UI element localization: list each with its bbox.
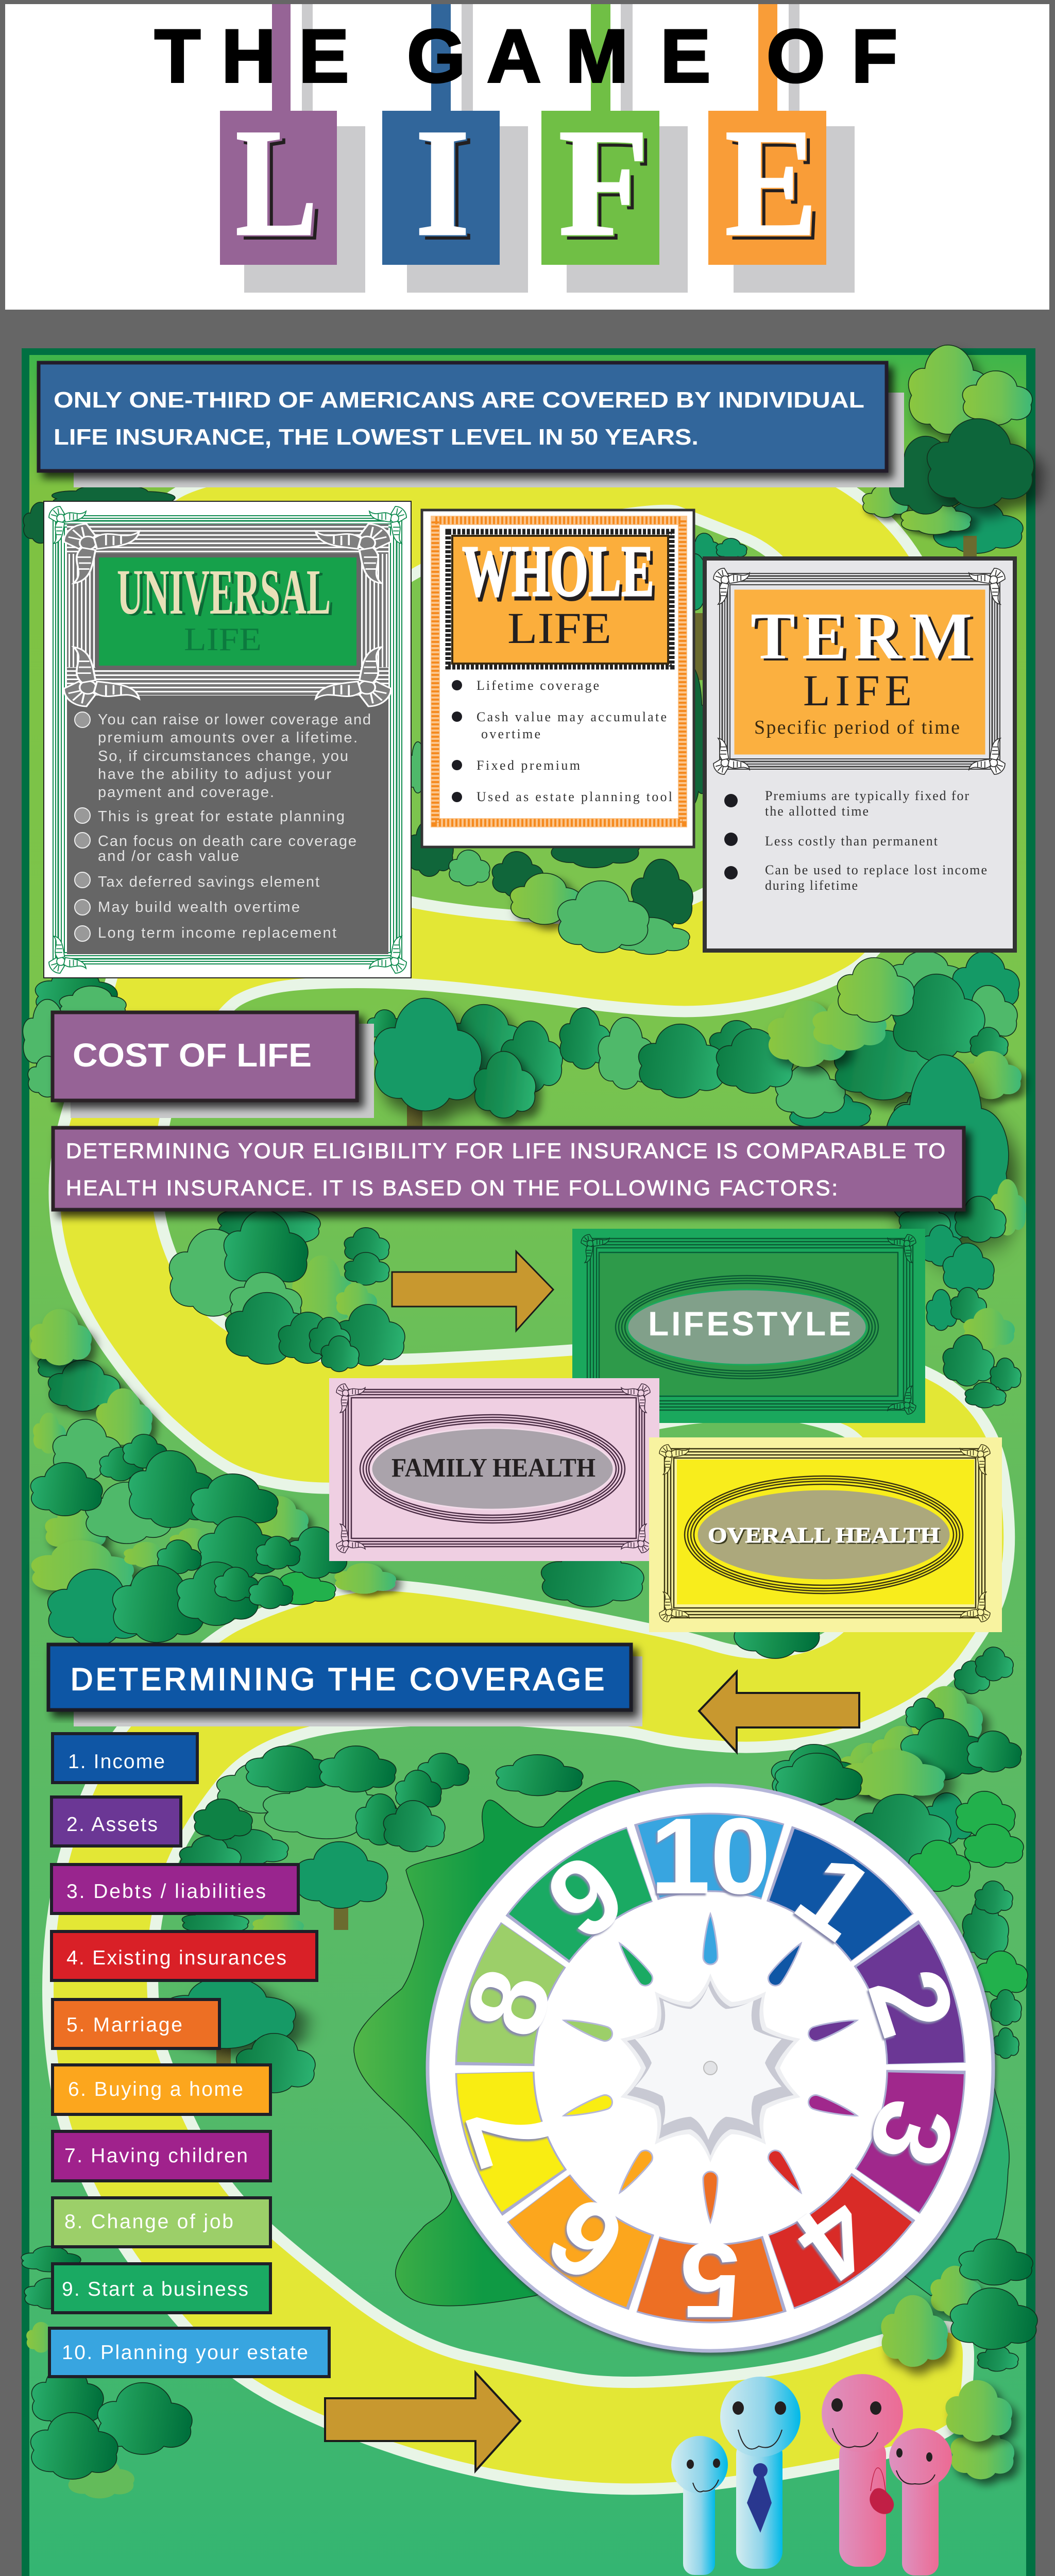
heading: universal life	[117, 557, 334, 657]
trees: under family and overall health cards	[541, 1546, 821, 1658]
ornate corners: overall health	[659, 1445, 990, 1622]
text: term life list: Less costly than permanent	[765, 834, 938, 849]
list: coverage factors	[49, 1734, 329, 2377]
card: lifestyle	[572, 1229, 925, 1423]
callout: only one-third: LIFE INSURANCE, THE LOWEST LEVEL IN 50 YEARS.	[54, 425, 699, 450]
item 3: 3. Debts / liabilities	[66, 1880, 266, 1903]
item 10	[49, 2328, 329, 2377]
tile: L: L	[239, 99, 320, 270]
heading: universal life: LIFE	[184, 621, 262, 657]
text: universal list	[98, 711, 371, 941]
item 7	[53, 2131, 270, 2181]
text: term life list: during lifetime	[765, 878, 858, 893]
wheel numbers: 9	[526, 1830, 645, 1963]
ornate corners: universal	[49, 506, 406, 973]
panel: universal life	[44, 501, 411, 978]
heading: determining the coverage	[48, 1645, 642, 1726]
title banner	[5, 4, 1049, 310]
text: universal list: payment and coverage.	[98, 784, 274, 801]
wheel numbers: 8	[442, 1955, 575, 2050]
heading: the game of: THE GAME OF	[155, 14, 897, 98]
wheel of life	[408, 1766, 1013, 2370]
trees: right of wheel	[775, 1750, 1028, 2059]
text: universal list: You can raise or lower coverage and	[98, 711, 371, 728]
arrow: right to family	[325, 2372, 520, 2471]
heading: whole life: LIFE	[507, 603, 611, 653]
card: family health	[329, 1378, 659, 1561]
text: whole life list: Fixed premium	[477, 758, 580, 773]
wheel numbers: 10	[650, 1795, 771, 1917]
item 4: 4. Existing insurances	[66, 1947, 286, 1969]
wheel numbers: 1	[775, 1830, 895, 1963]
tile: E: E	[727, 99, 820, 270]
heading: universal life: UNIVERSAL	[117, 557, 331, 628]
item 6: 6. Buying a home	[68, 2078, 243, 2100]
trees: cluster left of first arrow	[169, 1197, 405, 1371]
text: whole life list: Lifetime coverage	[477, 678, 599, 693]
peg: son	[671, 2436, 728, 2575]
trees: right of second arrow	[772, 1647, 1022, 1806]
heading: cost of life	[53, 1012, 374, 1118]
trees: top row right of cost of life	[367, 951, 1026, 1246]
callout: eligibility: HEALTH INSURANCE. IT IS BASED ON THE FOLLOWING FACTORS:	[66, 1176, 838, 1200]
item 6	[53, 2065, 270, 2114]
text: universal list: So, if circumstances change, you	[98, 748, 348, 765]
heading: term life: LIFE	[803, 666, 912, 715]
item 8	[53, 2198, 270, 2247]
item 8: 8. Change of job	[64, 2211, 233, 2233]
item 2: 2. Assets	[66, 1814, 158, 1836]
road island	[277, 511, 822, 920]
text: whole life list	[477, 678, 672, 804]
heading: term life: TERM	[754, 601, 975, 675]
tile: F: F	[558, 97, 649, 268]
trees: top left	[23, 484, 175, 543]
peg: daughter	[889, 2428, 952, 2575]
wheel numbers: 7	[442, 2086, 575, 2181]
tile: L: L	[235, 97, 317, 268]
tile: E: E	[725, 97, 818, 268]
arrow: left to coverage	[699, 1672, 859, 1752]
trees: right column beside lifestyle	[921, 1225, 1021, 1408]
ornate corners: term	[713, 568, 1005, 774]
callout: eligibility	[53, 1128, 964, 1210]
peg: father	[720, 2377, 801, 2569]
heading: determining the coverage: DETERMINING THE COVERAGE	[71, 1662, 604, 1697]
trees: left of cost of life	[23, 968, 126, 1097]
heading: whole life	[462, 530, 657, 653]
card: lifestyle: LIFESTYLE	[648, 1304, 851, 1343]
text: term life list: Can be used to replace lost income	[765, 862, 987, 877]
bullets: universal	[75, 712, 90, 941]
heading: whole life: WHOLE	[465, 534, 657, 616]
item 10: 10. Planning your estate	[62, 2342, 308, 2364]
card: overall health: OVERALL HEALTH	[709, 1526, 941, 1549]
item 1	[53, 1734, 197, 1783]
heading: term life: TERM	[751, 599, 972, 673]
text: universal list: Long term income replacement	[98, 925, 336, 941]
trees: top right	[862, 345, 1034, 559]
tile: F	[541, 4, 659, 273]
trees: lower left cluster	[30, 1413, 396, 1646]
item 5: 5. Marriage	[66, 2014, 182, 2036]
item 2	[52, 1797, 181, 1846]
text: whole life list: Used as estate planning tool	[477, 789, 672, 804]
heading: universal life: UNIVERSAL	[120, 558, 334, 630]
peg: mother	[822, 2374, 903, 2567]
tile: F: F	[564, 102, 654, 273]
tile: I: I	[420, 102, 475, 273]
wheel numbers: 2	[845, 1955, 979, 2050]
wheel petals	[561, 1914, 859, 2222]
family of game pegs	[671, 2374, 952, 2575]
text: universal list: Tax deferred savings element	[98, 874, 319, 890]
grey hanger strips and tile shadows	[244, 4, 855, 293]
item 9	[53, 2264, 270, 2313]
wheel hub	[620, 1973, 801, 2163]
panel: whole life	[422, 510, 694, 847]
arrow: right to lifestyle	[392, 1251, 553, 1331]
callout: only one-third: ONLY ONE-THIRD OF AMERICANS ARE COVERED BY INDIVIDUAL	[54, 387, 864, 413]
bullets: term life	[724, 794, 738, 879]
winding yellow road	[48, 457, 1009, 2489]
trees: behind whole and term cards	[407, 533, 747, 954]
text: term life list: Premiums are typically fixed for	[765, 788, 969, 803]
item 4	[52, 1931, 317, 1980]
wheel numbers: 4	[775, 2173, 895, 2306]
panel: term life	[705, 558, 1015, 951]
item 7: 7. Having children	[64, 2145, 248, 2167]
tile: I: I	[415, 97, 470, 268]
card: overall health	[649, 1437, 1002, 1632]
item 9: 9. Start a business	[62, 2278, 248, 2300]
tile: F: F	[560, 99, 651, 270]
ornate corners: family health	[336, 1384, 650, 1553]
text: term life list	[765, 788, 987, 893]
bullets: whole life	[452, 680, 462, 802]
heading: term life: Specific period of time	[754, 717, 960, 738]
card: overall health: OVERALL HEALTH	[708, 1524, 940, 1548]
hill: left of wheel	[354, 1781, 721, 2306]
heading: cost of life: COST OF LIFE	[73, 1037, 312, 1074]
callout: eligibility: DETERMINING YOUR ELIGIBILITY FOR LIFE INSURANCE IS COMPARABLE TO	[66, 1139, 945, 1163]
tile: L: L	[242, 102, 324, 273]
text: universal list: May build wealth overtime	[98, 899, 300, 916]
tile: E: E	[730, 102, 823, 273]
text: whole life list: overtime	[481, 726, 540, 741]
text: universal list: This is great for estate planning	[98, 808, 345, 825]
tile: E	[708, 4, 826, 273]
text: universal list: Can focus on death care coverage	[98, 833, 356, 850]
card: family health: FAMILY HEALTH	[392, 1453, 595, 1483]
trees: left column above lower cluster	[30, 1309, 152, 1445]
wheel numbers	[442, 1795, 979, 2341]
wheel segments	[408, 1766, 1013, 2370]
tile: L	[220, 4, 337, 273]
ornate corners: lifestyle	[581, 1234, 916, 1414]
wheel numbers: 5	[680, 2219, 740, 2341]
wheel numbers: 3	[845, 2086, 979, 2181]
tile: I	[382, 4, 500, 273]
text: term life list: the allotted time	[765, 804, 869, 819]
trees: bottom right	[881, 2239, 1037, 2479]
text: universal list: premium amounts over a lifetime.	[98, 730, 358, 746]
text: whole life list: Cash value may accumulate	[477, 709, 667, 724]
text: universal list: and /or cash value	[98, 848, 239, 865]
hill: right of wheel	[824, 2087, 1009, 2296]
trees: bottom left	[21, 2246, 192, 2498]
heading: whole life: WHOLE	[462, 530, 654, 612]
callout: only one-third	[39, 363, 904, 487]
item 3	[52, 1865, 298, 1913]
heading: term life	[751, 599, 975, 738]
item 1: 1. Income	[68, 1751, 165, 1773]
wheel numbers: 6	[526, 2173, 645, 2306]
tile: I: I	[417, 99, 472, 270]
trees: top of wheel and beside list	[162, 1746, 583, 2093]
text: universal list: have the ability to adjust your	[98, 766, 331, 783]
item 5	[53, 1999, 219, 2048]
